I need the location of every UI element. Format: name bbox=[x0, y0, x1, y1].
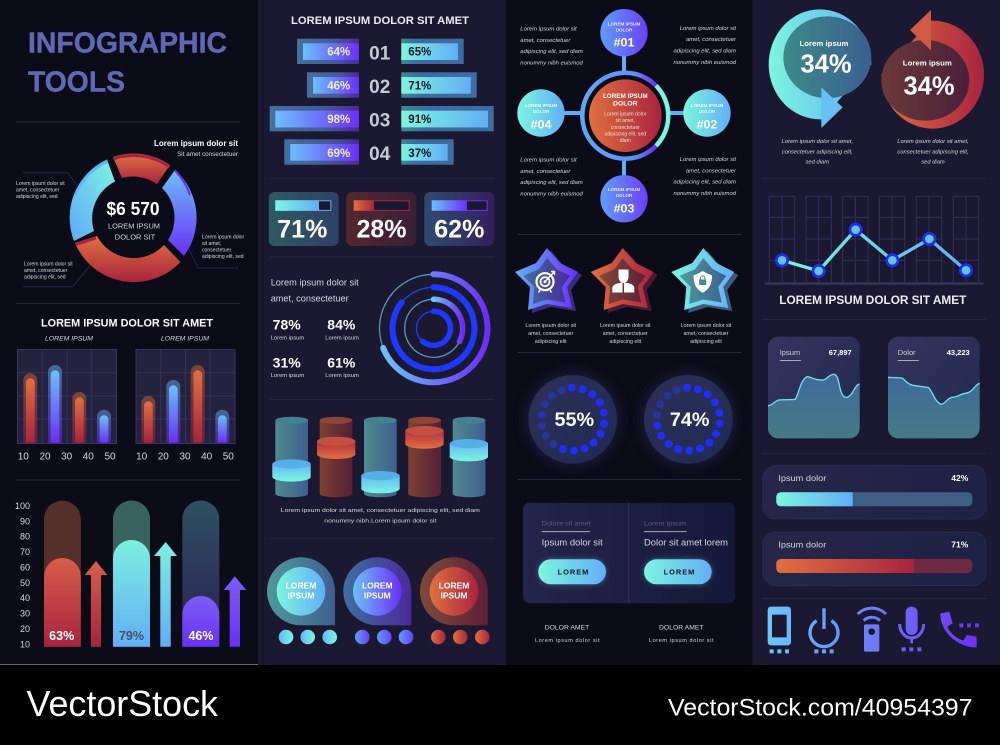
hub side texts: adipiscing elit, sed diam bbox=[520, 180, 583, 186]
donut segment: top orange bbox=[113, 154, 170, 184]
panel footer labels: Lorem ipsum dolor sit bbox=[535, 638, 600, 644]
hub side texts: nonummy nibh euismod bbox=[673, 60, 737, 66]
node 01 bbox=[600, 9, 648, 56]
right option: Lorem ipsum bbox=[644, 521, 686, 528]
line chart with grid bbox=[765, 196, 984, 285]
area chart card right: Dolor bbox=[898, 348, 916, 357]
dial 74%: 74% bbox=[670, 409, 710, 431]
node 03: LOREM IPSUM bbox=[608, 187, 640, 192]
star badge target bbox=[515, 248, 582, 313]
panel footer labels: DOLOR AMET bbox=[545, 625, 589, 632]
progress card 71% bbox=[763, 532, 986, 586]
progress card 42% bbox=[763, 466, 986, 519]
bar chart left: LOREM IPSUM bbox=[45, 336, 94, 342]
bar chart right bbox=[136, 336, 235, 462]
hub side texts: adipiscing elit, sed diam bbox=[673, 48, 736, 54]
hub centre: sit amet, bbox=[616, 118, 635, 124]
stat card 28%: 28% bbox=[356, 215, 407, 243]
circular arrow captions: consectetuer adipiscing elit, bbox=[897, 149, 969, 155]
y axis labels: 60 bbox=[20, 562, 30, 572]
node 04 bbox=[517, 89, 565, 137]
node 02: DOLOR bbox=[699, 109, 716, 114]
butterfly bars bbox=[270, 39, 494, 165]
heading: column 2: LOREM IPSUM DOLOR SIT AMET bbox=[291, 15, 469, 27]
y axis labels: 20 bbox=[20, 624, 30, 634]
star badge shield bbox=[671, 248, 738, 313]
star badge person bbox=[591, 248, 658, 313]
radial stats text: Lorem ipsum bbox=[271, 335, 304, 341]
title: TOOLS bbox=[28, 67, 125, 99]
radial stats text: 31% bbox=[273, 354, 301, 370]
circular arrow captions: consectetuer adipiscing elit, bbox=[782, 149, 853, 155]
node 04: LOREM IPSUM bbox=[525, 103, 557, 108]
bar chart right: 20 bbox=[158, 451, 169, 462]
pagination dots bbox=[279, 630, 490, 644]
arrow red bbox=[85, 561, 107, 647]
circular arrow captions: Lorem ipsum dolor sit amet, bbox=[897, 139, 969, 145]
icon: phone handset bbox=[940, 612, 979, 647]
progress card 42%: 42% bbox=[951, 473, 969, 483]
donut callouts: consectetuer bbox=[202, 248, 231, 254]
circular arrow red: Lorem ipsum bbox=[903, 59, 952, 68]
pin badge blue bbox=[343, 557, 411, 625]
row 01: 01 bbox=[369, 43, 391, 64]
circular arrow mint bbox=[769, 9, 871, 128]
donut value: $6 570 bbox=[106, 199, 160, 219]
bar chart left: 50 bbox=[104, 451, 116, 462]
dial 55% bbox=[526, 372, 620, 466]
y axis labels: 100 bbox=[15, 501, 30, 511]
hub side texts: amet, consectetuer bbox=[520, 38, 571, 44]
node 04: DOLOR bbox=[533, 109, 550, 114]
radial stats text: Lorem ipsum bbox=[271, 373, 304, 379]
icon: power bbox=[810, 608, 838, 653]
donut segment: bottom red bbox=[75, 236, 180, 282]
pin badge blue: LOREM bbox=[362, 580, 393, 590]
star captions: Lorem ipsum dolor sit bbox=[600, 323, 651, 329]
stat card 71%: 71% bbox=[277, 215, 327, 243]
donut callouts: amet, consectetuer bbox=[24, 268, 68, 274]
donut callouts bbox=[16, 139, 244, 280]
donut callouts: adipiscing elit, sed bbox=[24, 274, 66, 280]
area chart card right bbox=[888, 337, 980, 438]
icon: microphone bbox=[900, 607, 924, 651]
bar chart left: 10 bbox=[18, 451, 29, 462]
pin badge red: LOREM bbox=[439, 580, 469, 590]
hub side texts: Lorem ipsum dolor sit bbox=[680, 157, 736, 163]
hub side texts: nonummy nibh euismod bbox=[520, 60, 584, 66]
node 03 bbox=[600, 175, 648, 222]
bar chart right: 10 bbox=[136, 451, 148, 462]
icon: shield lock bbox=[694, 271, 712, 293]
title: INFOGRAPHIC bbox=[28, 28, 227, 60]
radial stats text: 84% bbox=[327, 316, 356, 332]
node 04: #04 bbox=[531, 117, 551, 131]
y axis labels: 80 bbox=[20, 532, 30, 542]
dial 74% bbox=[641, 372, 735, 466]
y axis labels: 10 bbox=[20, 639, 30, 649]
row 03: 03 bbox=[369, 111, 390, 132]
area chart card right: 43,223 bbox=[947, 348, 970, 357]
row 04: 37% bbox=[408, 148, 431, 160]
y axis labels: 40 bbox=[20, 593, 30, 603]
pin badge mint bbox=[267, 557, 335, 625]
donut callouts: adipiscing elit, sed bbox=[202, 254, 244, 260]
hub centre: Lorem ipsum dolor bbox=[604, 112, 647, 118]
radial stats text: Lorem ipsum dolor sit bbox=[271, 277, 359, 288]
node 02: #02 bbox=[697, 117, 717, 131]
row 02: 02 bbox=[369, 77, 390, 98]
row 04: 04 bbox=[369, 144, 391, 165]
radial stats text: amet, consectetuer bbox=[271, 293, 349, 304]
circular arrow red: 34% bbox=[903, 72, 955, 100]
donut value: LOREM IPSUM bbox=[108, 222, 160, 231]
pill bar 46% bbox=[182, 500, 219, 647]
hub side texts bbox=[520, 26, 737, 198]
node 01: DOLOR bbox=[616, 27, 633, 32]
pin badge red bbox=[420, 557, 488, 625]
node 02: LOREM IPSUM bbox=[691, 103, 723, 108]
bar chart right: 30 bbox=[179, 451, 191, 462]
watermark footer bbox=[0, 665, 1000, 745]
y axis labels bbox=[15, 501, 30, 649]
circular arrow captions: sed diam bbox=[806, 160, 829, 166]
cylinder 3 bbox=[361, 417, 400, 497]
cylinder caption bbox=[281, 508, 480, 525]
right option bbox=[644, 521, 728, 584]
row 03: 98% bbox=[327, 114, 350, 126]
radial stats text: Lorem ipsum bbox=[325, 335, 359, 341]
panel footer labels: DOLOR AMET bbox=[659, 625, 704, 632]
watermark footer: VectorStock bbox=[26, 683, 219, 724]
area chart card left: Ipsum bbox=[780, 348, 800, 357]
hub side texts: nonummy nibh euismod bbox=[673, 191, 737, 197]
arrow purple bbox=[224, 576, 246, 647]
row 03: 91% bbox=[408, 114, 431, 126]
donut callouts: Sit amet consectetuer bbox=[177, 151, 238, 158]
circular arrow captions: sed diam bbox=[921, 160, 945, 166]
cylinder 5 bbox=[450, 417, 488, 497]
radial rings bbox=[380, 274, 488, 382]
donut chart bbox=[16, 139, 244, 287]
left option: Ipsum dolor sit bbox=[542, 538, 603, 548]
hub side texts: adipiscing elit, sed diam bbox=[520, 49, 583, 55]
hub centre: diam bbox=[620, 138, 631, 144]
row 02: 46% bbox=[327, 80, 350, 92]
bar chart left: 40 bbox=[83, 451, 94, 462]
star captions: adipiscing elit bbox=[609, 339, 642, 345]
donut callouts: Lorem ipsum dolor sit bbox=[24, 262, 73, 268]
icon: person bbox=[612, 270, 634, 292]
star captions: amet, consectetuer bbox=[683, 331, 729, 337]
bar chart right: 40 bbox=[201, 451, 213, 462]
row 02: 71% bbox=[408, 80, 431, 92]
bar chart left: 30 bbox=[61, 451, 73, 462]
donut callouts: sit amet, bbox=[202, 241, 221, 247]
y axis labels: 70 bbox=[20, 547, 30, 557]
pill bar 79% bbox=[113, 500, 150, 647]
y axis labels: 30 bbox=[20, 609, 30, 619]
line chart heading: LOREM IPSUM DOLOR SIT AMET bbox=[779, 295, 966, 307]
star captions: adipiscing elit bbox=[535, 339, 567, 345]
circular arrow captions: Lorem ipsum dolor sit amet, bbox=[782, 139, 853, 145]
y axis labels: 50 bbox=[20, 578, 30, 588]
hub side texts: Lorem ipsum dolor sit bbox=[680, 26, 736, 32]
node 03: DOLOR bbox=[616, 193, 633, 198]
watermark footer: VectorStock.com/40954397 bbox=[668, 695, 972, 722]
stat card 62% bbox=[424, 192, 494, 246]
donut callouts: Lorem ipsum dolor sit bbox=[154, 139, 238, 148]
donut callouts: Lorem ipsum dolor bbox=[202, 234, 244, 240]
bar chart right: 50 bbox=[223, 451, 234, 462]
icon: target bbox=[536, 272, 554, 292]
cylinder caption: Lorem ipsum dolor sit amet, consectetuer adipiscing elit, sed diam bbox=[281, 508, 480, 514]
star captions: adipiscing elit bbox=[690, 339, 722, 345]
cylinder chart bbox=[272, 417, 488, 497]
hub side texts: amet, consectetuer bbox=[686, 168, 737, 174]
bar chart left: 20 bbox=[39, 451, 51, 462]
left option: Dolore sit amet bbox=[542, 521, 591, 528]
row 01 bbox=[297, 39, 464, 64]
circular arrow mint: Lorem ipsum bbox=[800, 39, 849, 48]
donut segment: purple bbox=[162, 170, 197, 256]
hub diagram bbox=[517, 9, 731, 222]
icon: remote with signal bbox=[858, 608, 886, 652]
radial stats text: Lorem ipsum bbox=[325, 373, 359, 379]
donut value bbox=[106, 199, 160, 242]
star captions: Lorem ipsum dolor sit bbox=[525, 323, 577, 329]
right option: LOREM bbox=[664, 568, 694, 577]
hub side texts: Lorem ipsum dolor sit bbox=[520, 158, 577, 164]
row 04: 69% bbox=[327, 148, 350, 160]
hub centre: LOREM IPSUM bbox=[603, 93, 648, 100]
cylinder caption: nonummy nibh.Lorem ipsum dolor sit bbox=[324, 519, 437, 525]
pin badge red: IPSUM bbox=[441, 591, 467, 601]
pill bar 46%: 46% bbox=[188, 629, 214, 643]
icon row bbox=[768, 607, 979, 653]
dial 55%: 55% bbox=[555, 409, 595, 431]
stat card 71% bbox=[269, 192, 339, 246]
button panel bbox=[523, 503, 735, 603]
row 04 bbox=[284, 139, 454, 165]
cylinder 4 bbox=[405, 417, 444, 497]
hub centre: consectetuer bbox=[611, 125, 640, 131]
progress card 71%: Ipsum dolor bbox=[778, 541, 827, 550]
pin badge blue: IPSUM bbox=[364, 591, 391, 601]
donut callouts: Lorem ipsum dolor sit bbox=[16, 181, 65, 187]
node 01: LOREM IPSUM bbox=[608, 21, 640, 26]
bar chart left bbox=[18, 336, 116, 462]
node 02 bbox=[683, 89, 731, 137]
progress card 42%: Ipsum dolor bbox=[778, 474, 827, 483]
area chart card left: 67,897 bbox=[829, 348, 852, 357]
donut callouts: amet, consectetuer bbox=[16, 188, 60, 194]
node 01: #01 bbox=[614, 36, 634, 50]
donut callouts: adipiscing elit, sed bbox=[16, 194, 58, 200]
circular arrow red bbox=[881, 10, 984, 129]
star captions bbox=[525, 323, 732, 345]
circular arrow mint: 34% bbox=[800, 51, 852, 79]
pill bar 63% bbox=[44, 501, 81, 647]
row 02 bbox=[307, 72, 477, 98]
donut segment: mint bbox=[70, 160, 115, 241]
star captions: amet, consectetuer bbox=[603, 331, 648, 337]
star captions: amet, consectetuer bbox=[528, 331, 573, 337]
y axis labels: 90 bbox=[20, 516, 30, 526]
stat card 62%: 62% bbox=[434, 215, 484, 243]
node 03: #03 bbox=[614, 201, 634, 215]
hub centre bbox=[589, 79, 662, 152]
cylinder 1 bbox=[272, 417, 311, 497]
hub side texts: amet, consectetuer bbox=[686, 37, 737, 43]
hub centre: DOLOR bbox=[613, 100, 638, 108]
hub side texts: nonummy nibh euismod bbox=[520, 192, 584, 198]
title bbox=[28, 28, 227, 99]
pill bar 79%: 79% bbox=[119, 629, 144, 643]
icon: smartphone bbox=[768, 607, 791, 653]
pill bar 63%: 63% bbox=[49, 629, 74, 643]
hub side texts: amet, consectetuer bbox=[520, 169, 571, 175]
panel footer labels bbox=[535, 625, 714, 644]
right option: Dolor sit amet lorem bbox=[644, 538, 728, 548]
row 01: 65% bbox=[408, 47, 431, 59]
area chart card left bbox=[768, 337, 860, 438]
row 01: 64% bbox=[327, 47, 350, 59]
radial stats text: 78% bbox=[273, 316, 301, 332]
left option: LOREM bbox=[558, 568, 588, 577]
hub centre: adipiscing elit, sed bbox=[604, 132, 646, 138]
arrow mint bbox=[154, 542, 177, 647]
donut value: DOLOR SIT bbox=[115, 232, 156, 242]
hub side texts: adipiscing elit, sed diam bbox=[673, 180, 736, 186]
progress card 71%: 71% bbox=[951, 540, 969, 550]
panel footer labels: Lorem ipsum dolor sit bbox=[649, 638, 714, 644]
left option bbox=[538, 521, 606, 584]
pin badge mint: IPSUM bbox=[288, 591, 314, 601]
heading: bar charts: LOREM IPSUM DOLOR SIT AMET bbox=[41, 318, 213, 330]
hub side texts: Lorem ipsum dolor sit bbox=[520, 27, 577, 33]
circular arrow captions bbox=[782, 139, 969, 166]
bar chart right: LOREM IPSUM bbox=[161, 336, 210, 342]
radial stats text bbox=[271, 277, 359, 379]
row 03 bbox=[270, 106, 494, 132]
pin badge mint: LOREM bbox=[286, 580, 316, 590]
star captions: Lorem ipsum dolor sit bbox=[681, 323, 732, 329]
radial stats text: 61% bbox=[327, 354, 356, 370]
cylinder 2 bbox=[317, 417, 355, 497]
stat card 28% bbox=[346, 192, 416, 246]
